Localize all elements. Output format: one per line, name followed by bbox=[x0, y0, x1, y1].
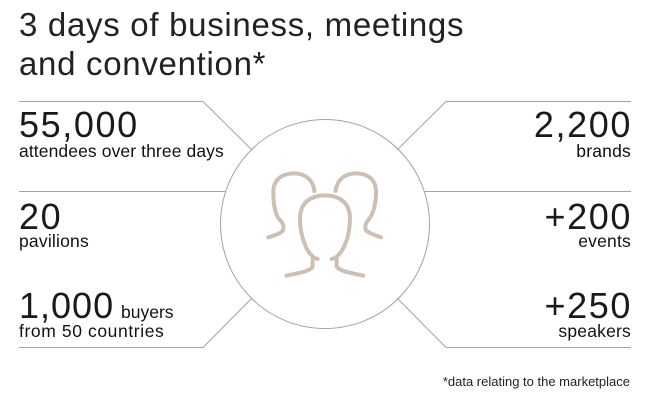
stat: speakers: +250 bbox=[544, 285, 632, 326]
stat: buyers: from 50 countries bbox=[19, 321, 164, 341]
title: and convention* bbox=[19, 45, 266, 82]
stat: events: events bbox=[578, 231, 631, 251]
icon: people bbox=[268, 173, 381, 276]
stat: buyers: 1,000 bbox=[19, 285, 114, 326]
stat: attendees: attendees over three days bbox=[19, 141, 224, 161]
stat: speakers: speakers bbox=[558, 321, 631, 341]
title: 3 days of business, meetings bbox=[19, 6, 464, 43]
stat: buyers bbox=[19, 285, 174, 341]
stat: pavilions bbox=[19, 196, 89, 251]
stat: pavilions: 20 bbox=[19, 196, 62, 237]
stat: brands: 2,200 bbox=[534, 104, 632, 145]
stat: brands: brands bbox=[576, 141, 631, 161]
stat: buyers: buyers bbox=[121, 302, 174, 322]
stat: attendees: 55,000 bbox=[19, 104, 139, 145]
stat: attendees bbox=[19, 104, 224, 161]
title bbox=[19, 6, 464, 82]
stat: events: +200 bbox=[544, 196, 632, 237]
footnote: *data relating to the marketplace bbox=[443, 374, 630, 389]
stat: pavilions: pavilions bbox=[19, 231, 89, 251]
